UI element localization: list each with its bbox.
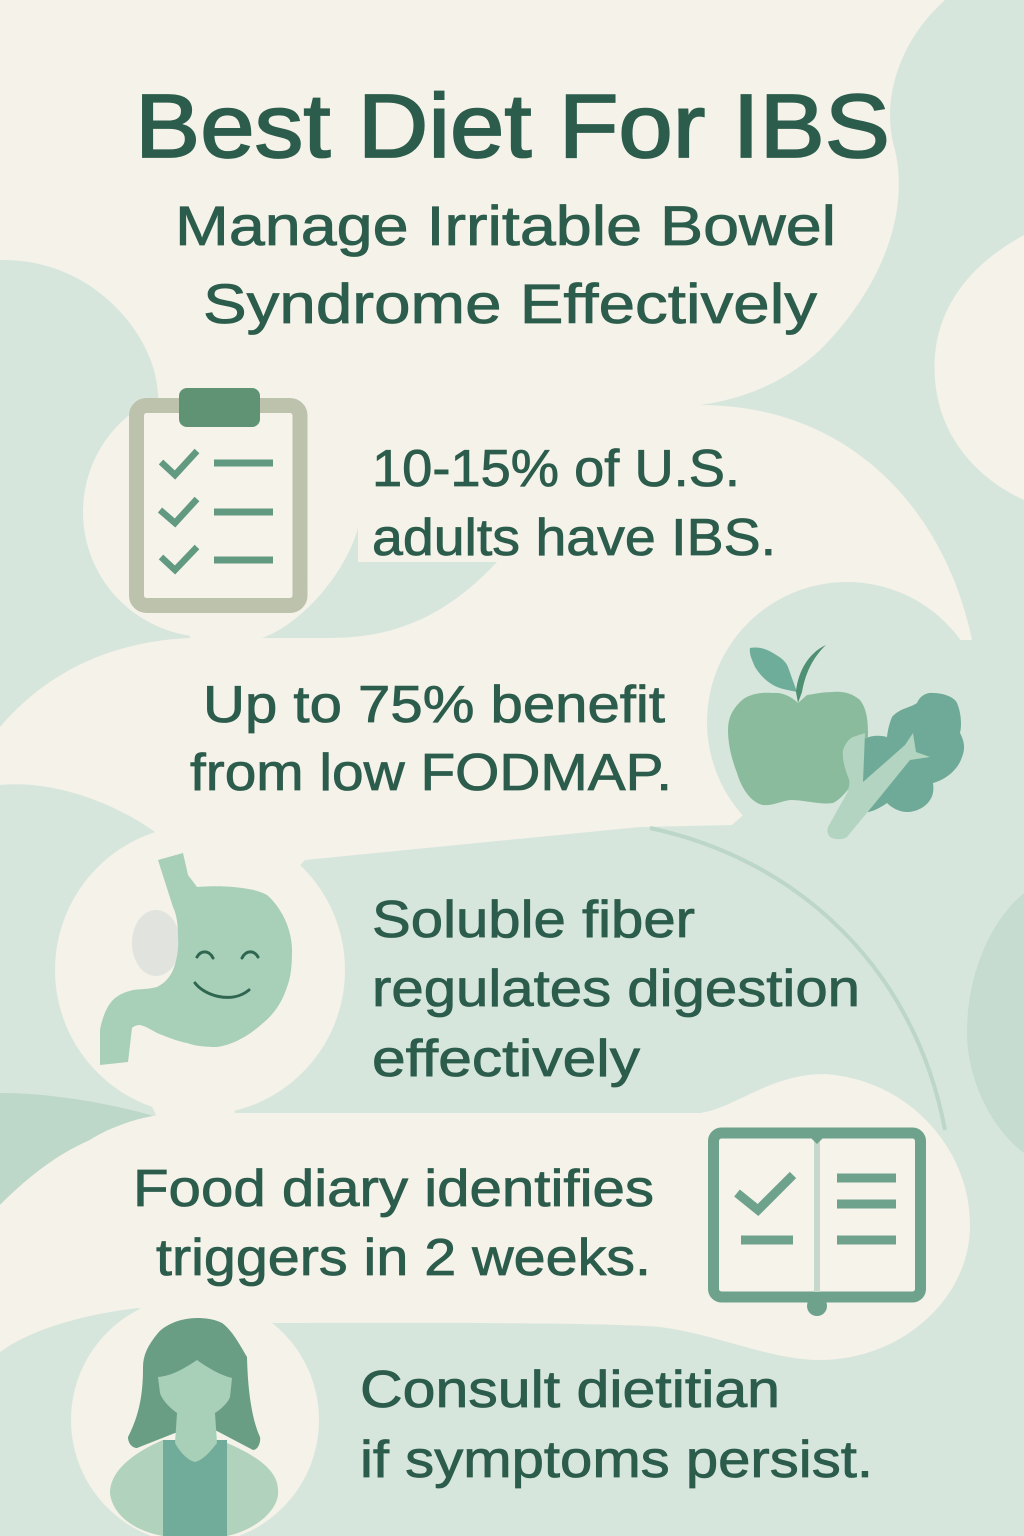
text: soluble fiber: Soluble fiber	[372, 891, 695, 949]
text: low FODMAP statistic: Up to 75% benefit	[203, 676, 666, 734]
text: adults statistic: adults have IBS.	[372, 509, 776, 567]
text: adults statistic	[372, 440, 776, 567]
text: soluble fiber: effectively	[372, 1030, 640, 1088]
text: adults statistic: 10-15% of U.S.	[372, 440, 740, 498]
subtitle	[175, 194, 836, 335]
text: low FODMAP statistic: from low FODMAP.	[190, 744, 672, 802]
icon: clipboard checklist	[136, 388, 300, 606]
text: food diary	[133, 1160, 654, 1287]
title: Best Diet For IBS	[135, 77, 890, 177]
icon: apple and leafy greens	[728, 645, 964, 839]
subtitle: Syndrome Effectively	[203, 272, 817, 335]
text: soluble fiber	[372, 891, 860, 1088]
icon: smiling stomach	[100, 853, 292, 1065]
text: consult dietitian	[360, 1361, 873, 1489]
icon: dietitian person	[110, 1318, 278, 1536]
text: food diary: triggers in 2 weeks.	[156, 1229, 651, 1287]
subtitle: Manage Irritable Bowel	[175, 194, 836, 257]
text: consult dietitian: Consult dietitian	[360, 1361, 780, 1419]
text: low FODMAP statistic	[190, 676, 672, 802]
text: soluble fiber: regulates digestion	[372, 960, 860, 1018]
text: food diary: Food diary identifies	[133, 1160, 654, 1218]
icon: open diary book	[714, 1132, 920, 1316]
text: consult dietitian: if symptoms persist.	[360, 1431, 873, 1489]
